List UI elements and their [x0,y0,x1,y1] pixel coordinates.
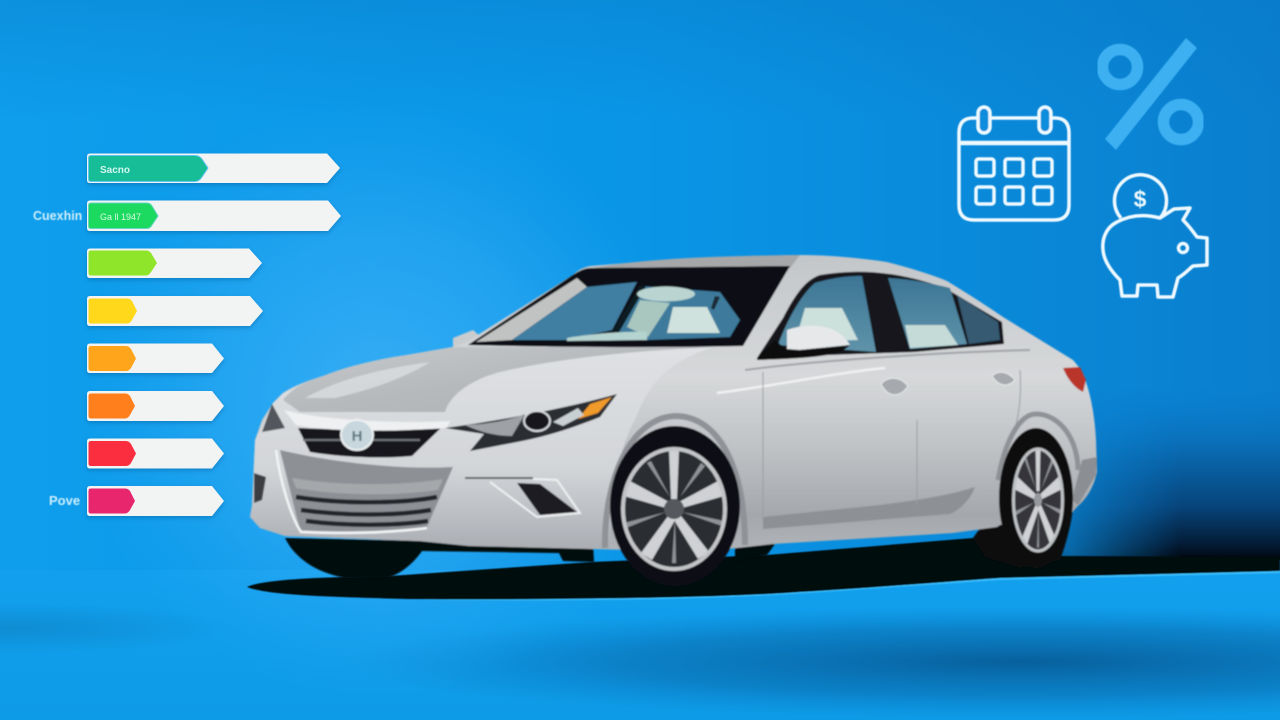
rear door handle [992,372,1015,385]
piggy eye [1178,244,1188,252]
icon: percent [1102,38,1198,150]
mirror base [757,340,850,360]
spokes [1013,448,1063,548]
side label: Pove: Pove [49,493,80,508]
rear door glass [888,278,967,349]
interior dark band [612,286,646,334]
bar 2: green [87,200,341,231]
hood [283,347,720,412]
front tyre [610,426,740,586]
front end shading [250,345,720,548]
lower grille slats [296,497,437,525]
bar 5: amber [87,344,224,373]
windshield glass [512,282,637,340]
windshield frame [468,266,790,347]
bar 8: pink [87,486,224,516]
headlight [445,394,617,451]
front door handle [881,378,908,395]
rear rim [1013,448,1063,552]
car [250,255,1097,586]
side label: Cuexhin: Cuexhin [33,209,82,223]
rating bars [87,154,341,516]
icon: piggy bank with coin [1103,175,1207,297]
left headlight [262,404,285,432]
lower grille chrome edge [276,450,427,533]
headlight clear section [553,408,584,426]
coin [1115,175,1167,218]
rear door seat [905,325,958,348]
shadow shape [247,538,1280,599]
character line [717,368,885,393]
windshield pillar [476,278,587,342]
spokes [624,450,724,563]
car body [250,255,1097,552]
front wheel arch lip [605,416,745,548]
rear view mirror [637,286,695,302]
front door seat [795,308,858,342]
upper grille [298,424,445,457]
bar 4: yellow [87,296,263,326]
seat belt strap [711,296,720,310]
fog lamp brow [465,477,533,479]
emblem: H [352,428,362,445]
bar 2 label: Ga ll 1947 [100,212,141,222]
rear bumper shade [1072,457,1097,505]
fog lamp insert [517,483,577,515]
front door glass [778,276,876,352]
headlight lens [524,411,550,431]
bar 1 label: Sacno [100,165,130,176]
tail light [1063,367,1086,392]
mirror [787,326,850,350]
bar 6: orange [87,391,224,421]
icon: calendar [959,107,1069,220]
headlight amber [578,397,612,419]
headlight chrome [465,414,525,436]
bar 3: lime [87,248,262,278]
bar 1: teal [87,154,340,183]
belt line trim [745,350,1030,370]
front seat [667,307,720,333]
dollar sign: $ [1134,186,1147,212]
rear wheel arch lip [998,414,1078,480]
quarter glass [957,295,1000,344]
underbody and chin [285,538,594,578]
bar 7: red [87,438,224,468]
hood highlight [305,362,430,398]
front rim [622,448,726,570]
rear wheel well shadow [973,431,1074,568]
ground shadow [247,538,1280,600]
chrome grille bar [284,410,450,431]
underbody behind front tyre [735,540,775,562]
side air vent [254,473,266,503]
rear tyre [999,428,1073,568]
dashboard [567,332,647,341]
hub [664,499,684,519]
side window frame [757,272,1004,358]
left mirror [453,330,482,347]
interior pale panel [627,300,670,337]
roof edge [583,255,800,272]
side sill [763,487,975,529]
lower grille [280,450,453,531]
windshield interior glass [612,286,740,340]
piggy body [1103,208,1207,297]
emblem [341,420,373,450]
lower grille light band [292,478,443,494]
grille slat [303,439,420,441]
fog lamp frame [490,479,580,517]
hub [1034,493,1042,507]
shadow highlight edge [420,570,1280,600]
door seams [763,370,1021,520]
